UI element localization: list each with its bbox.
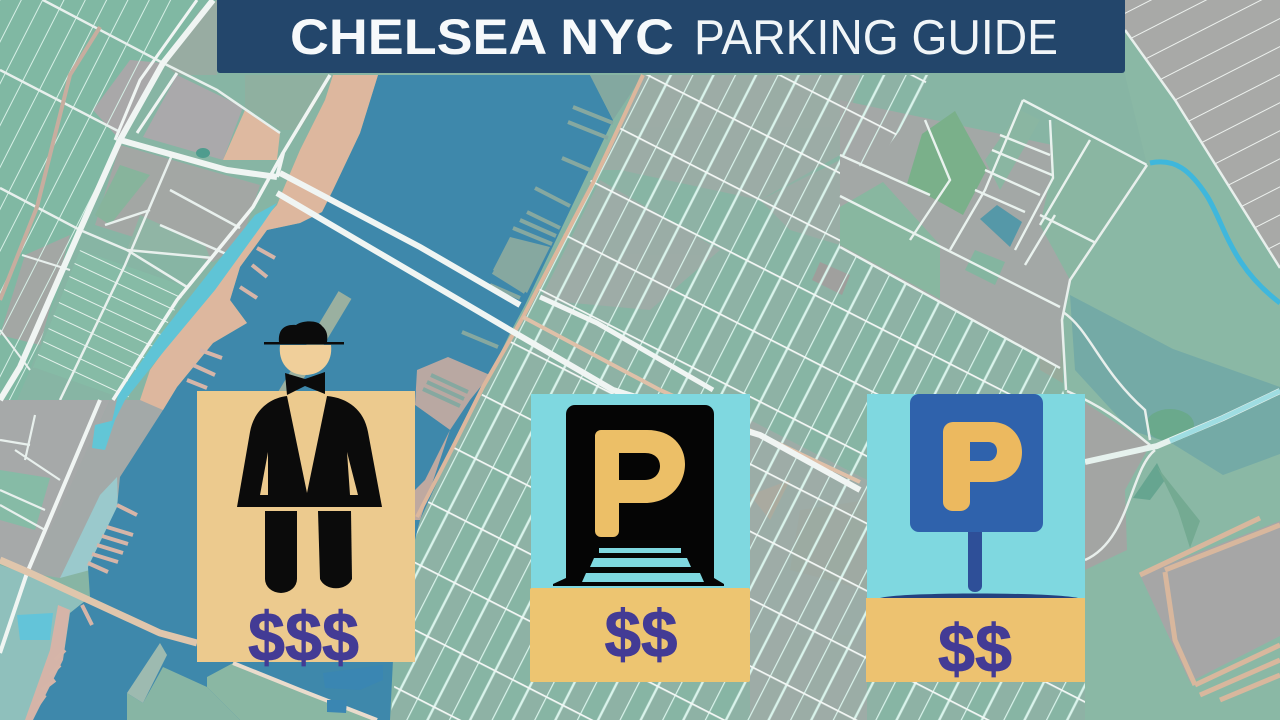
map: north-east river xyxy=(1150,162,1280,303)
map: Hudson river xyxy=(33,75,613,720)
map: eastern park xyxy=(1063,30,1280,720)
map: dark park band xyxy=(1070,295,1280,444)
map: south island xyxy=(207,662,377,720)
map: north-west street lines xyxy=(0,0,280,420)
map: east district blocks xyxy=(812,100,1147,368)
title banner xyxy=(217,0,1125,73)
panel: valet parking xyxy=(197,321,415,676)
map: peach shoreline xyxy=(140,75,378,410)
map: piers xyxy=(38,248,275,705)
map: eastern park grey lot xyxy=(1067,391,1150,570)
title: regular part: PARKING GUIDE xyxy=(694,11,1058,65)
map: south ponds xyxy=(323,665,383,713)
price: three dollars: $$$ xyxy=(248,598,359,676)
map: east district streets xyxy=(840,100,1147,368)
map: river island pier xyxy=(282,295,345,400)
icon: valet figure xyxy=(237,321,382,593)
panel: street parking xyxy=(866,394,1085,687)
title: bold part: CHELSEA NYC xyxy=(290,9,674,65)
map: central blotches xyxy=(540,75,1066,720)
map: north-west blocks xyxy=(0,0,333,440)
map: south-east grey lot xyxy=(1140,521,1280,682)
map: south pier land xyxy=(127,643,167,703)
map: peach avenue xyxy=(417,75,643,517)
map: park trails xyxy=(1062,30,1280,560)
map: lower-left land xyxy=(0,400,175,720)
map: central street grid xyxy=(390,75,1085,720)
map: main roads xyxy=(0,0,860,653)
map: cyan road xyxy=(1085,391,1280,462)
map: peach road to south-west xyxy=(0,560,197,643)
panel: garage parking xyxy=(530,394,750,682)
map: east shore land xyxy=(415,75,643,520)
icon: garage with P xyxy=(553,405,724,586)
price: two dollars: $$ xyxy=(604,597,678,672)
map: cyan shore channel xyxy=(110,203,277,430)
price: two dollars: $$ xyxy=(938,611,1012,687)
map: upper right blocks xyxy=(1125,0,1280,268)
icon: parking sign xyxy=(880,394,1078,598)
